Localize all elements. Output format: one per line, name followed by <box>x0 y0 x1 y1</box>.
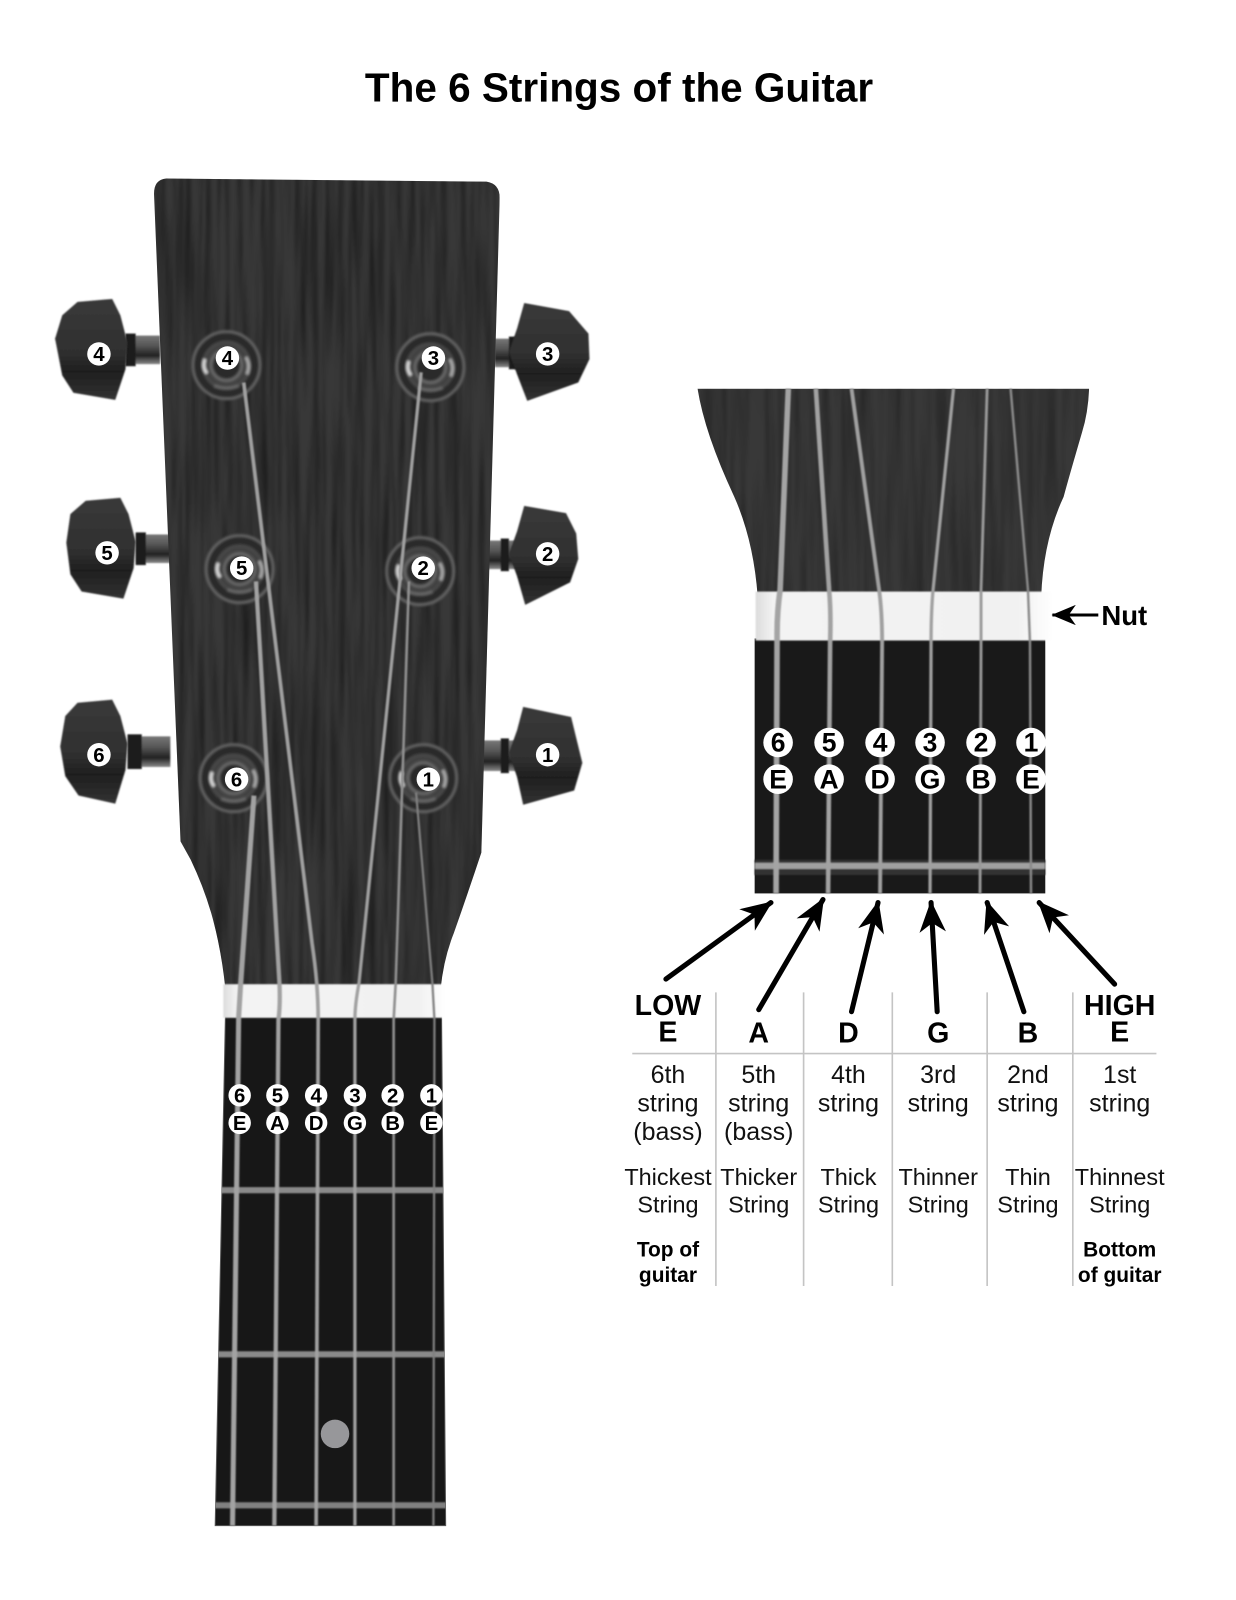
column: low E: String <box>637 1192 699 1218</box>
close-up string labels: B <box>971 764 991 794</box>
peg number labels: 4 <box>93 344 105 366</box>
column: high E: 1st <box>1103 1061 1136 1089</box>
column: high E: Thinnest <box>1075 1164 1165 1190</box>
peg number labels: 5 <box>101 543 113 565</box>
column: D <box>818 1017 879 1218</box>
nut label: Nut <box>1101 600 1147 631</box>
peg number labels: 5 <box>236 558 247 580</box>
nut close-up photo <box>694 389 1092 893</box>
close-up string labels: E <box>769 764 787 794</box>
neck string number and letter labels: B <box>385 1113 400 1135</box>
column: G: Thinner <box>898 1164 978 1190</box>
neck string number and letter labels: 3 <box>349 1085 361 1107</box>
close-up string labels: 2 <box>974 728 988 758</box>
peg number labels: 2 <box>418 558 429 580</box>
column: high E: HIGH <box>1084 990 1155 1022</box>
column: A: A <box>748 1017 769 1049</box>
column: D: 4th <box>831 1061 866 1089</box>
close-up neck <box>694 389 1092 603</box>
column: G: 3rd <box>920 1061 956 1089</box>
nut <box>223 984 446 1018</box>
fret marker dot <box>321 1420 349 1448</box>
column: B: string <box>997 1090 1058 1118</box>
close-up string labels: E <box>1022 764 1040 794</box>
peg number labels: 2 <box>542 544 553 566</box>
arrow: nut <box>1052 614 1098 617</box>
tuning posts <box>193 332 464 812</box>
neck string number and letter labels: 2 <box>387 1085 398 1107</box>
tuning peg shafts <box>125 334 525 773</box>
close-up strings <box>776 389 1031 893</box>
column: low E: (bass) <box>633 1118 703 1146</box>
title: The 6 Strings of the Guitar <box>365 65 873 111</box>
column: low E: Thickest <box>624 1164 712 1190</box>
close-up string labels: A <box>820 764 839 794</box>
peg number labels: 1 <box>423 769 434 791</box>
frets <box>210 1190 450 1505</box>
close-up fretboard <box>755 638 1045 893</box>
column: B: 2nd <box>1007 1061 1049 1089</box>
neck string number and letter labels: 6 <box>234 1085 245 1107</box>
peg number labels: 4 <box>222 348 234 370</box>
close-up string labels <box>763 728 1046 794</box>
column: G <box>898 1017 978 1218</box>
close-up string labels: G <box>920 764 940 794</box>
column: B: Thin <box>1005 1164 1051 1190</box>
close-up string labels: D <box>871 764 890 794</box>
column: G: String <box>908 1192 969 1218</box>
column: low E: 6th <box>651 1061 685 1089</box>
column: G: G <box>927 1017 949 1049</box>
neck string number and letter labels <box>228 1084 443 1135</box>
column: low E: string <box>637 1090 698 1118</box>
close-up string labels: 5 <box>822 728 836 758</box>
neck string number and letter labels: 5 <box>272 1085 283 1107</box>
close-up string labels: 6 <box>771 728 785 758</box>
neck string number and letter labels: G <box>347 1113 363 1135</box>
column: low E: guitar <box>639 1264 697 1287</box>
peg number labels: 1 <box>542 745 553 767</box>
column: high E <box>1075 990 1165 1287</box>
column: B: String <box>997 1192 1059 1218</box>
column: D: string <box>818 1090 879 1118</box>
peg number labels: 6 <box>93 745 105 767</box>
column: A: 5th <box>741 1061 776 1089</box>
column: A <box>720 1017 797 1218</box>
neck string number and letter labels: 1 <box>426 1085 437 1107</box>
close-up string labels: 3 <box>923 728 937 758</box>
peg number labels: 3 <box>428 348 439 370</box>
close-up string labels: 1 <box>1024 728 1038 758</box>
column: A: String <box>728 1192 789 1218</box>
strings <box>233 372 434 1526</box>
column: A: (bass) <box>724 1118 793 1146</box>
arrows from table to strings <box>666 900 1115 1012</box>
column: B <box>997 1017 1059 1218</box>
column: low E <box>624 990 712 1287</box>
column: low E: LOW <box>635 990 701 1022</box>
neck string number and letter labels: 4 <box>310 1085 322 1107</box>
peg number labels <box>87 342 559 791</box>
fretboard <box>210 1017 450 1526</box>
column: high E: Bottom <box>1083 1238 1156 1261</box>
column: D: D <box>838 1017 859 1049</box>
column: high E: of guitar <box>1078 1264 1162 1287</box>
column: low E: Top of <box>637 1238 699 1261</box>
string reference table <box>624 990 1165 1287</box>
close-up fret <box>755 860 1045 875</box>
column: D: Thick <box>820 1164 877 1190</box>
column: B: B <box>1018 1017 1038 1049</box>
neck string number and letter labels: D <box>309 1113 324 1135</box>
column: G: string <box>908 1090 969 1118</box>
neck string number and letter labels: E <box>233 1113 246 1135</box>
column: high E: E <box>1110 1016 1129 1048</box>
column: low E: E <box>658 1016 677 1048</box>
column: high E: String <box>1089 1192 1150 1218</box>
guitar headstock and neck <box>55 173 589 1526</box>
close-up nut <box>756 592 1053 641</box>
nut callout <box>1052 600 1147 631</box>
headstock <box>144 173 511 999</box>
close-up string labels: 4 <box>873 728 888 758</box>
peg number labels: 6 <box>231 769 242 791</box>
column: A: string <box>728 1090 789 1118</box>
column: D: String <box>818 1192 879 1218</box>
column: high E: string <box>1089 1090 1150 1118</box>
neck string number and letter labels: A <box>270 1113 285 1135</box>
neck string number and letter labels: E <box>425 1113 438 1135</box>
peg number labels: 3 <box>542 344 553 366</box>
tuning pegs <box>55 299 589 805</box>
column: A: Thicker <box>720 1164 797 1190</box>
